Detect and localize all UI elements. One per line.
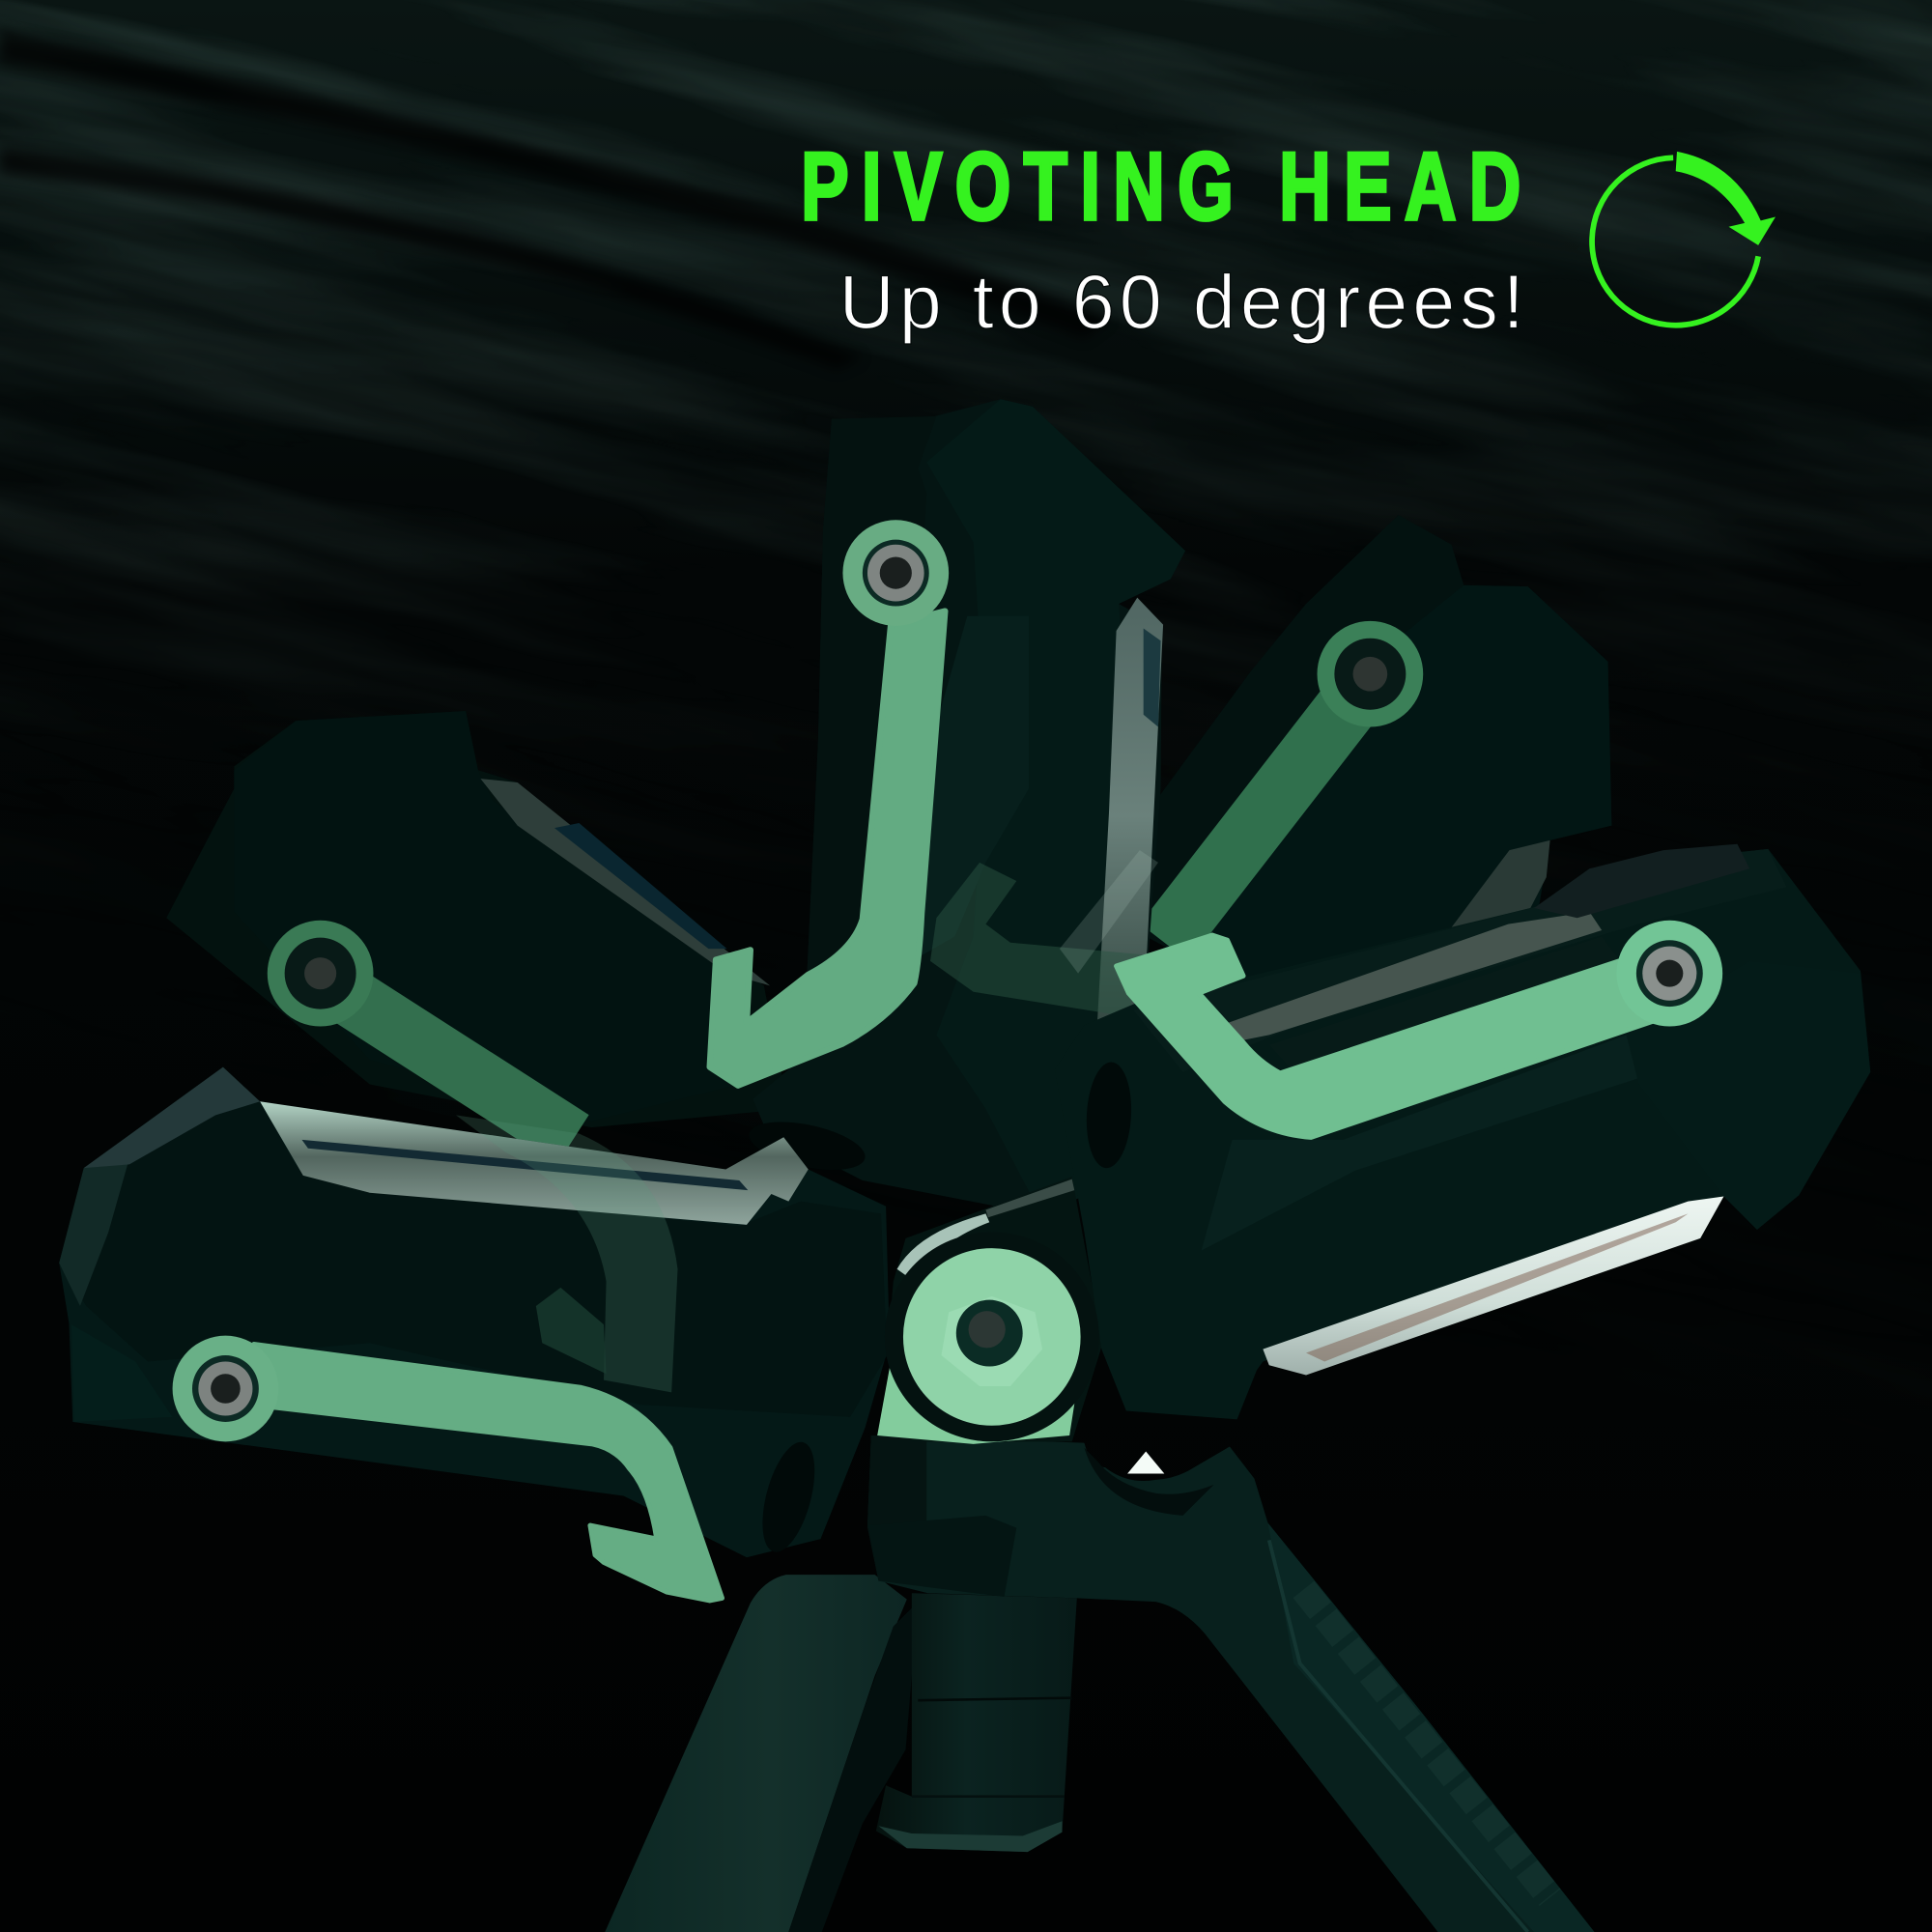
- textured panels: [1202, 1035, 1638, 1251]
- lower panel: [71, 1324, 173, 1422]
- small light spark: [1127, 1452, 1164, 1474]
- grip ribbing: [1267, 1523, 1595, 1932]
- glass strip: [260, 1101, 809, 1225]
- side oval: [753, 1436, 825, 1557]
- ghost body: [166, 711, 788, 1127]
- left tripod leg: [605, 1575, 918, 1932]
- tripod right leg and yoke: [867, 1435, 1595, 1932]
- ghost pivot: [1318, 621, 1423, 727]
- ghost handle: [1164, 696, 1355, 943]
- light head: vertical position: [710, 399, 1185, 1215]
- light head: lower left position: [59, 1067, 890, 1601]
- ghost glass strip: [1435, 840, 1550, 949]
- ghost glass strip: [480, 779, 770, 985]
- light head: upper right ghost position: [1146, 515, 1611, 1023]
- background: dark slate texture: [0, 0, 1932, 680]
- top rim: [1133, 849, 1786, 1072]
- ghost pivot: [268, 921, 373, 1026]
- glass strip: [1263, 1197, 1723, 1375]
- pivot screw: [173, 1336, 278, 1441]
- foot oval: [745, 1113, 869, 1179]
- body: [59, 1067, 890, 1557]
- side oval: [1084, 1061, 1134, 1169]
- handle: [710, 611, 945, 1086]
- light head: upper left ghost position: [166, 711, 788, 1140]
- handle: [1117, 935, 1656, 1137]
- overlapped ghost hook: [930, 863, 1146, 1016]
- back panel: [807, 416, 936, 974]
- front face: [59, 1067, 887, 1417]
- light head: right front position: [1055, 844, 1870, 1419]
- body: [1055, 849, 1870, 1419]
- handle: [254, 1345, 722, 1601]
- hinge arm: [877, 1177, 1103, 1444]
- title: PIVOTING HEAD: [801, 132, 1534, 241]
- body: [753, 399, 1185, 1215]
- main hinge knob: [885, 1233, 1099, 1441]
- ghost body: [1146, 515, 1611, 1023]
- subtitle: Up to 60 degrees!: [839, 258, 1524, 344]
- tripod centre column: [876, 1593, 1077, 1852]
- textured side: [926, 399, 1185, 1215]
- switch detail: [1534, 844, 1749, 918]
- ghost light band: [1060, 850, 1158, 974]
- ghost handle: [332, 985, 573, 1140]
- green neck: [877, 1368, 1078, 1444]
- glass strip: [1096, 598, 1163, 1035]
- ghost handle overlay: [456, 1115, 678, 1392]
- icon: rotation arrow: [1592, 152, 1776, 326]
- pivot screw: [842, 520, 949, 626]
- pivot screw: [1616, 921, 1722, 1026]
